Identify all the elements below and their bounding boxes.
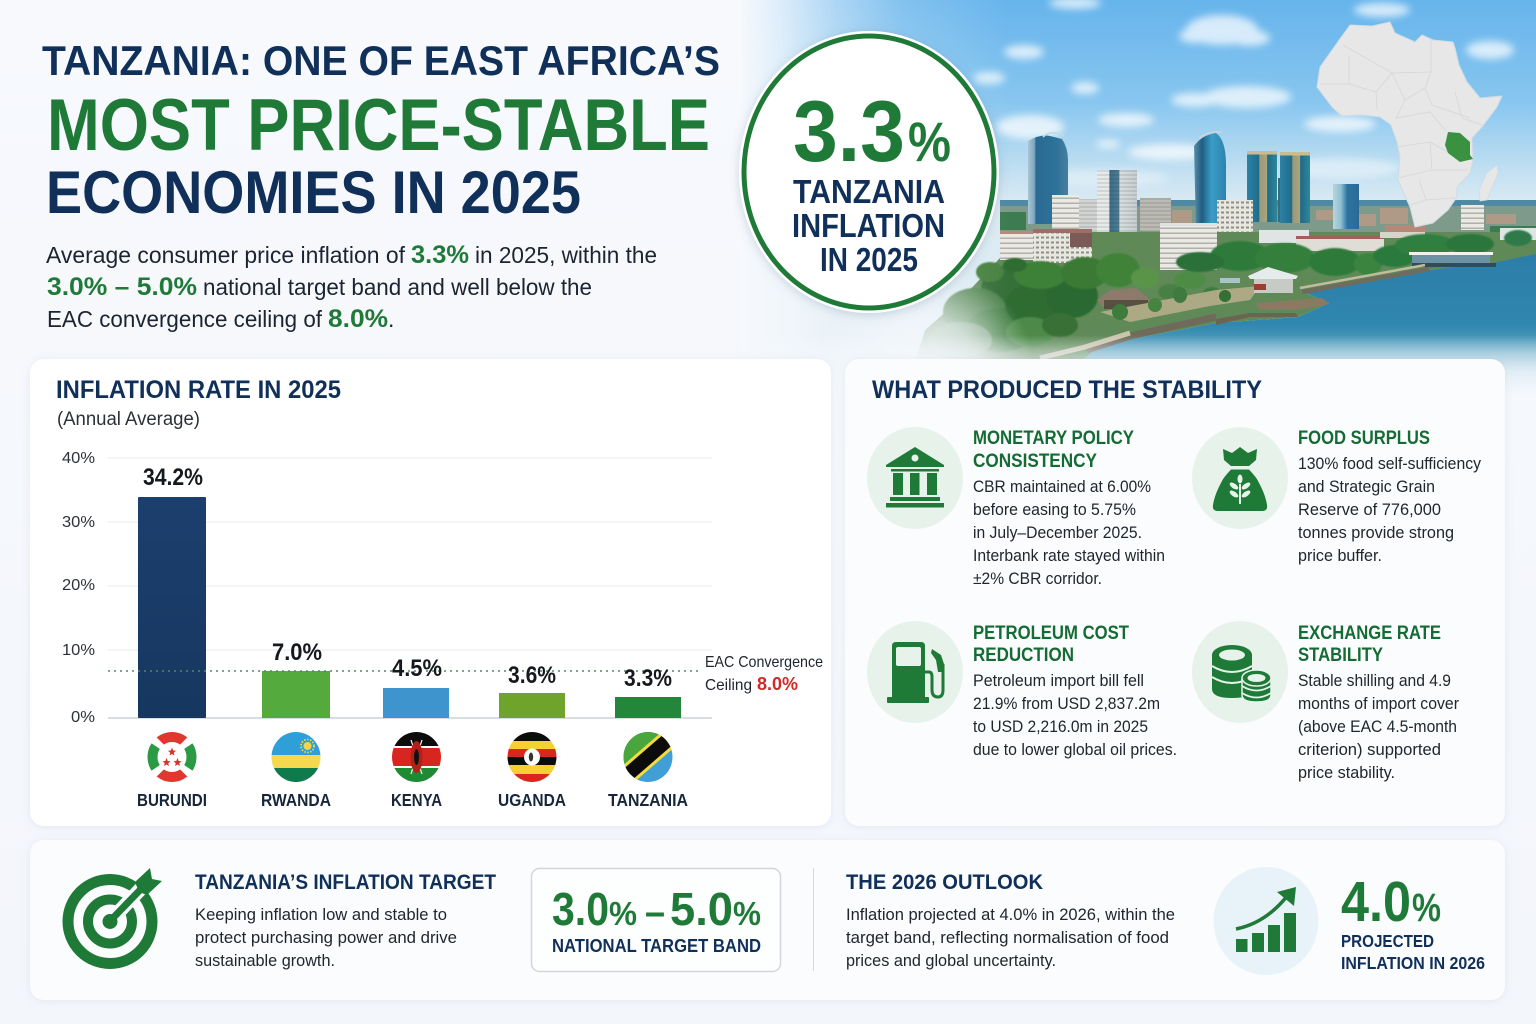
text: food surplus — [1298, 428, 1481, 565]
text: monetary policy consistency: ±2% CBR corridor. — [973, 569, 1102, 588]
text: the 2026 outlook: target band, reflecting normalisation of food — [846, 928, 1169, 947]
icon: target with arrow — [68, 868, 162, 964]
bar chart: 34.2% — [143, 464, 203, 491]
text: exchange rate stability: EXCHANGE RATE — [1298, 623, 1441, 644]
stat box: national target band: 3.0 — [552, 883, 609, 935]
stat box: national target band: NATIONAL TARGET BAND — [552, 936, 761, 956]
Tanzania highlight — [1445, 132, 1473, 162]
intro text: 3.3% — [411, 241, 469, 269]
country labels: UGANDA — [498, 790, 566, 810]
text: food surplus: price buffer. — [1298, 546, 1382, 565]
country labels: RWANDA — [261, 790, 331, 810]
intro text: . — [388, 306, 394, 332]
bar chart: 3.3% — [624, 665, 672, 692]
text: exchange rate stability: (above EAC 4.5-month — [1298, 717, 1457, 736]
intro text: 8.0% — [328, 305, 388, 333]
chart subheading: (Annual Average) — [57, 409, 200, 430]
stat box: national target band: % — [609, 895, 637, 932]
text: the 2026 outlook: Inflation projected at 4.0% in 2026, within the — [846, 905, 1175, 924]
panel: inflation rate chart — [30, 359, 831, 826]
flag: Uganda — [507, 732, 557, 782]
hero photo: Dar es Salaam skyline and harbour — [740, 0, 1536, 395]
icon: bank — [867, 427, 963, 529]
text: monetary policy consistency — [973, 428, 1165, 588]
stat box: national target band: % — [733, 895, 761, 932]
text: Tanzania's inflation target: sustainable growth. — [195, 951, 335, 970]
text: the 2026 outlook: THE 2026 OUTLOOK — [846, 871, 1043, 894]
map of Africa with Tanzania highlighted — [1317, 22, 1502, 227]
text: Tanzania's inflation target — [195, 871, 496, 970]
bar chart: 20% — [62, 577, 95, 594]
text: petroleum cost reduction: REDUCTION — [973, 645, 1074, 666]
panel: what produced the stability — [845, 359, 1505, 826]
intro text: in 2025, within the — [475, 242, 657, 268]
panel heading: WHAT PRODUCED THE STABILITY — [872, 376, 1262, 404]
bar chart — [62, 450, 712, 726]
title — [42, 37, 720, 226]
icon: grain sack — [1192, 427, 1288, 529]
country labels — [137, 790, 688, 810]
title: ECONOMIES IN 2025 — [46, 159, 581, 226]
headline stat badge: 3.3% — [739, 31, 999, 313]
country labels: KENYA — [391, 790, 442, 810]
EAC ceiling annotation — [705, 654, 823, 694]
text: exchange rate stability: months of import cover — [1298, 694, 1459, 713]
text: exchange rate stability: Stable shilling and 4.9 — [1298, 671, 1451, 690]
stat: projected 4.0% — [1341, 870, 1485, 973]
stat box: national target band: – — [645, 890, 665, 934]
bar chart: 7.0% — [272, 639, 322, 666]
text: petroleum cost reduction: due to lower global oil prices. — [973, 740, 1177, 759]
intro text: EAC convergence ceiling of — [47, 306, 323, 332]
text: monetary policy consistency: Interbank rate stayed within — [973, 546, 1165, 565]
text: food surplus: tonnes provide strong — [1298, 523, 1454, 542]
text: monetary policy consistency: CONSISTENCY — [973, 451, 1097, 472]
flag: Burundi — [148, 732, 196, 782]
text: exchange rate stability: STABILITY — [1298, 645, 1383, 666]
flag: Rwanda — [271, 732, 321, 782]
icon: rising bar chart — [1214, 867, 1318, 975]
text: petroleum cost reduction: Petroleum import bill fell — [973, 671, 1144, 690]
text: petroleum cost reduction — [973, 623, 1177, 759]
title: MOST PRICE-STABLE — [47, 85, 710, 166]
headline stat badge: 3.3%: % — [908, 110, 951, 173]
bar chart: 10% — [62, 642, 95, 659]
headline stat badge: 3.3%: 3.3 — [793, 84, 905, 180]
stat: projected 4.0%: PROJECTED — [1341, 931, 1434, 951]
chart heading: INFLATION RATE IN 2025 — [56, 376, 341, 404]
stat: projected 4.0%: INFLATION IN 2026 — [1341, 953, 1485, 973]
headline stat badge: 3.3%: IN 2025 — [820, 241, 918, 278]
text: exchange rate stability — [1298, 623, 1459, 782]
text: monetary policy consistency: CBR maintained at 6.00% — [973, 477, 1151, 496]
icon: fuel pump — [867, 621, 963, 723]
intro text: national target band and well below the — [203, 274, 592, 300]
country labels: BURUNDI — [137, 790, 207, 810]
headline stat badge: 3.3%: TANZANIA — [793, 173, 945, 210]
bar chart: 3.6% — [508, 662, 556, 689]
bar chart: 30% — [62, 514, 95, 531]
text: monetary policy consistency: in July–December 2025. — [973, 523, 1142, 542]
text: petroleum cost reduction: 21.9% from USD 2,837.2m — [973, 694, 1160, 713]
flag: Tanzania — [624, 732, 672, 782]
text: food surplus: Reserve of 776,000 — [1298, 500, 1441, 519]
text: food surplus: and Strategic Grain — [1298, 477, 1435, 496]
intro text: Average consumer price inflation of — [46, 242, 406, 268]
text: petroleum cost reduction: to USD 2,216.0m in 2025 — [973, 717, 1148, 736]
text: Tanzania's inflation target: Keeping inflation low and stable to — [195, 905, 447, 924]
text: exchange rate stability: price stability. — [1298, 763, 1395, 782]
text: monetary policy consistency: MONETARY POLICY — [973, 428, 1134, 449]
text: the 2026 outlook: prices and global uncertainty. — [846, 951, 1056, 970]
title: TANZANIA: ONE OF EAST AFRICA’S — [42, 37, 720, 84]
stat box: national target band: 5.0 — [670, 883, 733, 935]
text: petroleum cost reduction: PETROLEUM COST — [973, 623, 1129, 644]
bar chart: 40% — [62, 450, 95, 467]
bar chart: 4.5% — [392, 655, 442, 682]
EAC ceiling annotation: EAC Convergence — [705, 654, 823, 671]
intro text — [46, 241, 657, 333]
text: food surplus: 130% food self-sufficiency — [1298, 454, 1481, 473]
stat: projected 4.0%: 4.0 — [1341, 870, 1411, 934]
panel: target and outlook — [30, 840, 1505, 1000]
headline stat badge: 3.3%: INFLATION — [792, 207, 945, 244]
stat: projected 4.0%: % — [1412, 886, 1441, 930]
text: food surplus: FOOD SURPLUS — [1298, 428, 1430, 449]
EAC ceiling annotation: Ceiling — [705, 677, 752, 694]
EAC ceiling annotation: 8.0% — [757, 674, 798, 694]
stat box: national target band — [532, 868, 780, 972]
text: monetary policy consistency: before easing to 5.75% — [973, 500, 1136, 519]
bar chart: 0% — [71, 709, 95, 726]
text: Tanzania's inflation target: TANZANIA’S INFLATION TARGET — [195, 871, 496, 894]
flag: Kenya — [392, 732, 442, 782]
country labels: TANZANIA — [608, 790, 688, 810]
intro text: 3.0% – 5.0% — [47, 273, 197, 301]
text: exchange rate stability: criterion) supported — [1298, 740, 1441, 759]
text: the 2026 outlook — [846, 871, 1175, 970]
icon: coin stacks — [1192, 621, 1288, 723]
text: Tanzania's inflation target: protect purchasing power and drive — [195, 928, 457, 947]
